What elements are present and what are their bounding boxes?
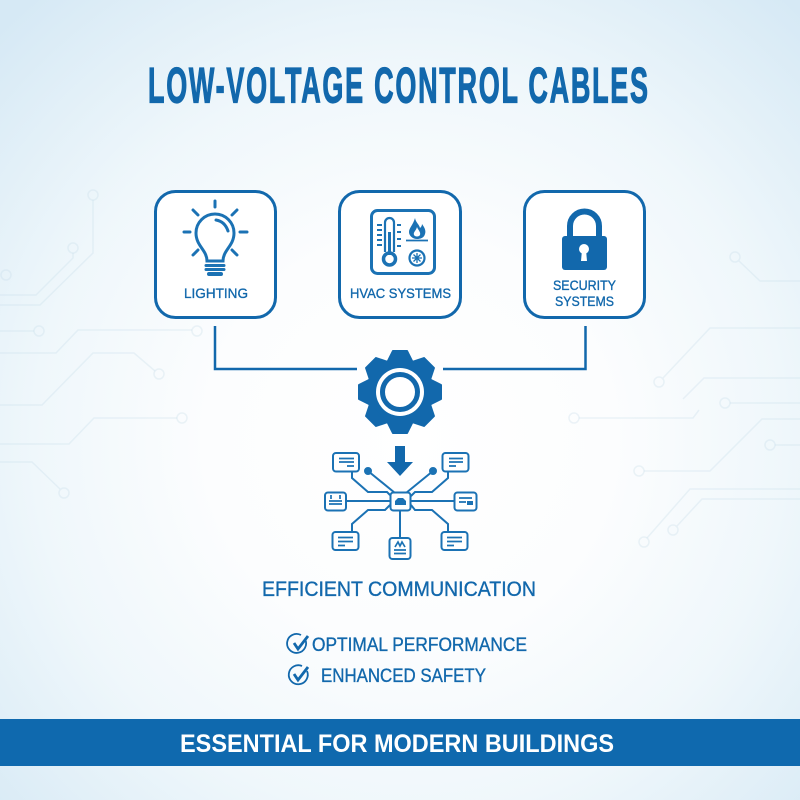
arrow: down — [387, 446, 413, 476]
circuit traces: left — [0, 190, 202, 498]
heading: efficient communication: EFFICIENT COMMUNICATION — [262, 578, 536, 601]
network nodes — [325, 453, 476, 559]
benefit: enhanced safety — [289, 665, 486, 687]
node details — [329, 458, 472, 554]
icon: check — [287, 634, 308, 653]
connector lines — [215, 326, 586, 369]
icon: hvac thermostat — [372, 210, 434, 274]
label: hvac systems: HVAC SYSTEMS — [350, 285, 451, 301]
icon: check — [289, 665, 308, 684]
label: security systems: SECURITY — [553, 277, 617, 293]
icon: gear — [359, 351, 441, 433]
diagram: communication network — [325, 453, 476, 559]
panel: security systems — [524, 192, 644, 318]
node accent — [467, 501, 473, 505]
label: enhanced safety: ENHANCED SAFETY — [321, 666, 486, 687]
label: optimal performance: OPTIMAL PERFORMANCE — [312, 635, 527, 656]
network links — [346, 468, 454, 537]
banner text: ESSENTIAL FOR MODERN BUILDINGS — [180, 730, 614, 758]
icon: light bulb — [184, 201, 247, 274]
label: security systems — [553, 277, 617, 309]
title: LOW-VOLTAGE CONTROL CABLES — [148, 58, 648, 114]
circuit traces: right — [569, 252, 800, 547]
label: lighting: LIGHTING — [184, 285, 248, 301]
icon: padlock — [562, 212, 607, 270]
benefit: optimal performance — [287, 634, 527, 656]
panel: lighting — [156, 192, 276, 318]
panel: hvac systems — [340, 192, 460, 318]
label: security systems: SYSTEMS — [555, 293, 614, 309]
network hub — [390, 492, 410, 510]
banner — [0, 719, 800, 766]
